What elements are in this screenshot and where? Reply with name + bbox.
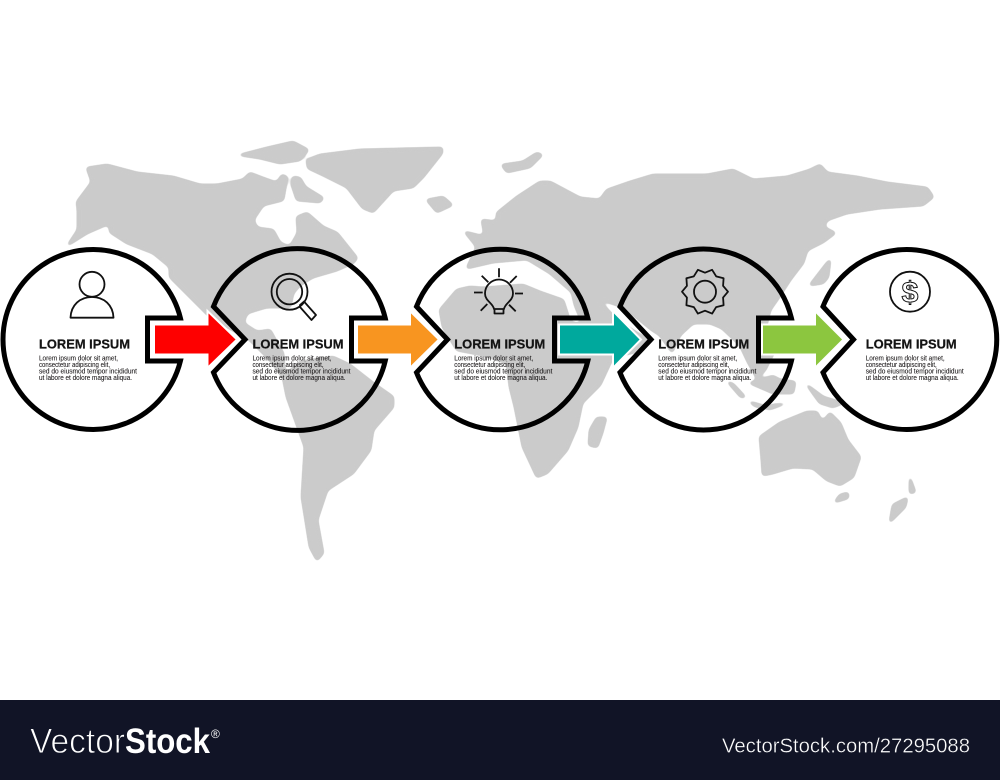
map: Java bbox=[750, 402, 784, 409]
step 2 heading: LOREM IPSUM bbox=[252, 336, 344, 351]
footer logo: Stock bbox=[125, 722, 210, 761]
arrow: red bbox=[154, 311, 237, 368]
step 4 panel bbox=[620, 249, 791, 430]
footer image id: VectorStock.com/27295088 bbox=[722, 736, 970, 758]
map: Iceland bbox=[427, 197, 452, 212]
step 1 body text: sed do eiusmod tempor incididunt bbox=[39, 367, 137, 376]
step 5 body text: sed do eiusmod tempor incididunt bbox=[866, 367, 964, 376]
footer logo: Vector bbox=[30, 722, 125, 761]
step 4 body text: ut labore et dolore magna aliqua. bbox=[658, 373, 751, 382]
step 4 body text: consectetur adipiscing elit, bbox=[658, 360, 729, 369]
map: Sumatra bbox=[728, 382, 745, 397]
step 2 body text: ut labore et dolore magna aliqua. bbox=[252, 373, 346, 382]
step 1 panel bbox=[3, 249, 180, 430]
world map background bbox=[68, 142, 933, 560]
map: North America bbox=[68, 165, 357, 380]
step 5 body text: ut labore et dolore magna aliqua. bbox=[866, 373, 959, 382]
map: South America bbox=[283, 357, 393, 560]
step 4 heading: LOREM IPSUM bbox=[658, 336, 749, 351]
icon: light bulb bbox=[474, 268, 523, 314]
step 1 heading: LOREM IPSUM bbox=[39, 336, 130, 351]
map: New Guinea bbox=[807, 385, 843, 407]
step 2 body text: sed do eiusmod tempor incididunt bbox=[252, 367, 350, 376]
map: Borneo bbox=[750, 376, 795, 393]
icon: dollar coin: $ bbox=[902, 276, 919, 309]
step 2 panel bbox=[214, 249, 385, 430]
step 5 heading: LOREM IPSUM bbox=[866, 336, 957, 351]
arrow: teal bbox=[559, 311, 641, 368]
map: Tasmania bbox=[835, 493, 848, 502]
footer logo: ® bbox=[211, 727, 220, 741]
footer logo bbox=[30, 722, 220, 761]
step 4 circle outline bbox=[620, 249, 791, 430]
map: Arctic island bbox=[240, 142, 308, 163]
step 5 body text: Lorem ipsum dolor sit amet, bbox=[866, 354, 945, 362]
map: Baffin island bbox=[292, 177, 323, 202]
step 5 panel bbox=[823, 250, 997, 430]
step 3 circle outline bbox=[416, 249, 588, 430]
step 2 body text: Lorem ipsum dolor sit amet, bbox=[252, 354, 332, 362]
step 1 body text: consectetur adipiscing elit, bbox=[39, 360, 110, 369]
map: Australia bbox=[760, 412, 860, 485]
map: Eurasia bbox=[465, 165, 933, 378]
map: New Zealand north bbox=[910, 478, 915, 493]
map: Africa bbox=[440, 285, 650, 477]
step 5 body text bbox=[866, 354, 964, 382]
icon: dollar coin bbox=[890, 272, 930, 312]
step 2 circle outline bbox=[214, 249, 385, 430]
map: New Zealand south bbox=[890, 498, 907, 522]
icon: user bbox=[70, 272, 114, 318]
step 1 body text bbox=[39, 354, 137, 382]
step 1 body text: Lorem ipsum dolor sit amet, bbox=[39, 354, 118, 362]
step 2 body text bbox=[252, 354, 350, 382]
step 3 body text: ut labore et dolore magna aliqua. bbox=[454, 373, 547, 382]
step 3 body text: consectetur adipiscing elit, bbox=[454, 360, 525, 369]
map: Madagascar bbox=[589, 418, 606, 447]
icon: gear bbox=[682, 270, 728, 314]
footer bar bbox=[0, 700, 1000, 780]
map: Greenland bbox=[307, 148, 442, 212]
step 5 body text: consectetur adipiscing elit, bbox=[866, 360, 937, 369]
step 3 panel bbox=[416, 249, 588, 430]
arrow: orange bbox=[357, 311, 439, 368]
step 1 circle outline bbox=[3, 249, 180, 430]
step 1 body text: ut labore et dolore magna aliqua. bbox=[39, 373, 132, 382]
step 5 circle outline bbox=[823, 250, 997, 430]
step 2 body text: consectetur adipiscing elit, bbox=[252, 360, 324, 369]
step 4 body text: sed do eiusmod tempor incididunt bbox=[658, 367, 756, 376]
step 4 body text bbox=[658, 354, 756, 382]
step 4 body text: Lorem ipsum dolor sit amet, bbox=[658, 354, 737, 362]
map: Japan bbox=[810, 260, 830, 285]
icon: magnifying glass bbox=[272, 274, 316, 320]
arrow: green bbox=[762, 311, 844, 368]
step 3 body text: Lorem ipsum dolor sit amet, bbox=[454, 354, 533, 362]
step 3 body text: sed do eiusmod tempor incididunt bbox=[454, 367, 552, 376]
map: Svalbard bbox=[502, 153, 542, 172]
step 3 heading: LOREM IPSUM bbox=[454, 336, 545, 351]
step 3 body text bbox=[454, 354, 552, 382]
